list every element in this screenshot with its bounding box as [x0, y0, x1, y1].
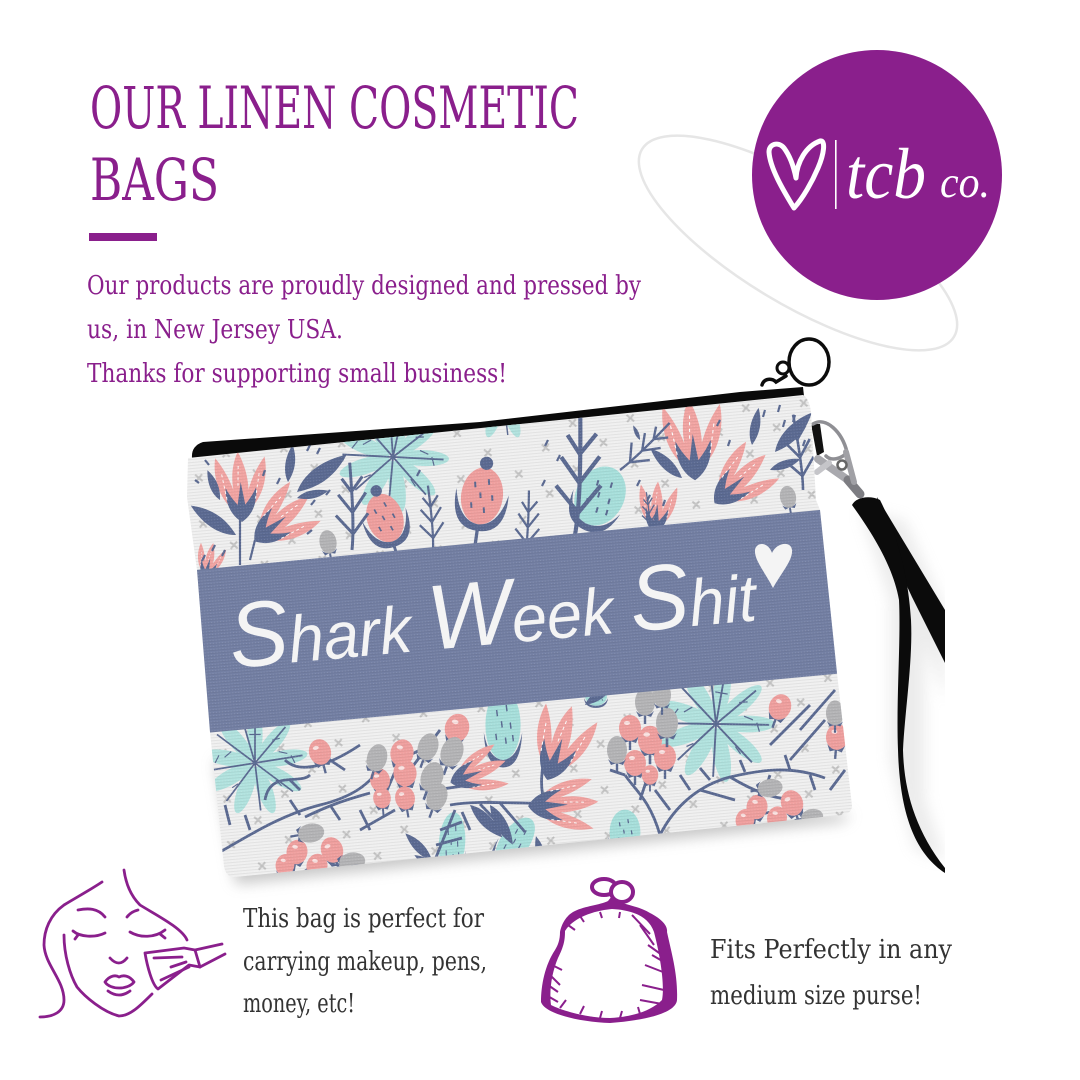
- purse body: [541, 896, 677, 1023]
- brand suffix: co.: [940, 158, 990, 207]
- purse description: [710, 935, 952, 1011]
- brand name: tcb: [846, 134, 926, 214]
- rear strap: [877, 497, 945, 663]
- blue band: [190, 509, 845, 733]
- purse description: Fits Perfectly in any: [710, 935, 952, 965]
- intro text: [87, 271, 641, 389]
- bag body with floral print: [187, 395, 852, 876]
- bottom floral print: [201, 656, 849, 888]
- front strap: [852, 497, 945, 873]
- bag description: [243, 904, 487, 1019]
- divider: [835, 140, 837, 209]
- purse hatching: [546, 912, 664, 1018]
- title: [90, 74, 579, 214]
- intro text: Thanks for supporting small business!: [87, 359, 507, 389]
- logo badge: [752, 50, 1002, 300]
- intro text: us, in New Jersey USA.: [87, 315, 343, 345]
- zipper: [192, 387, 804, 458]
- short loop: [811, 424, 824, 456]
- bag description: carrying makeup, pens,: [243, 947, 487, 977]
- linen texture: [187, 396, 852, 876]
- icon: face with makeup brush: [40, 870, 225, 1017]
- purse clasp knobs: [592, 879, 633, 902]
- intro text: Our products are proudly designed and pressed by: [87, 271, 641, 301]
- title underline: [89, 233, 157, 241]
- bag description: money, etc!: [243, 989, 355, 1019]
- strap shadow: [860, 510, 945, 860]
- bag description: This bag is perfect for: [243, 904, 484, 934]
- cosmetic bag: [187, 387, 852, 876]
- top floral print: [191, 404, 814, 570]
- orbit ellipse decoration: [611, 97, 985, 389]
- zipper pull ring: [762, 339, 829, 385]
- title: BAGS: [90, 146, 219, 214]
- band heart: [755, 544, 792, 588]
- purse description: medium size purse!: [710, 981, 922, 1011]
- band message: Shark Week Shit: [225, 538, 762, 688]
- bag shadow: [215, 760, 852, 884]
- heart icon: [769, 141, 824, 208]
- purse interior highlight: [550, 909, 663, 1018]
- silver clasp: [813, 422, 860, 494]
- title: OUR LINEN COSMETIC: [90, 74, 579, 142]
- badge circle: [752, 50, 1002, 300]
- wrist strap and clasp: [811, 422, 945, 873]
- icon: coin purse: [541, 879, 677, 1023]
